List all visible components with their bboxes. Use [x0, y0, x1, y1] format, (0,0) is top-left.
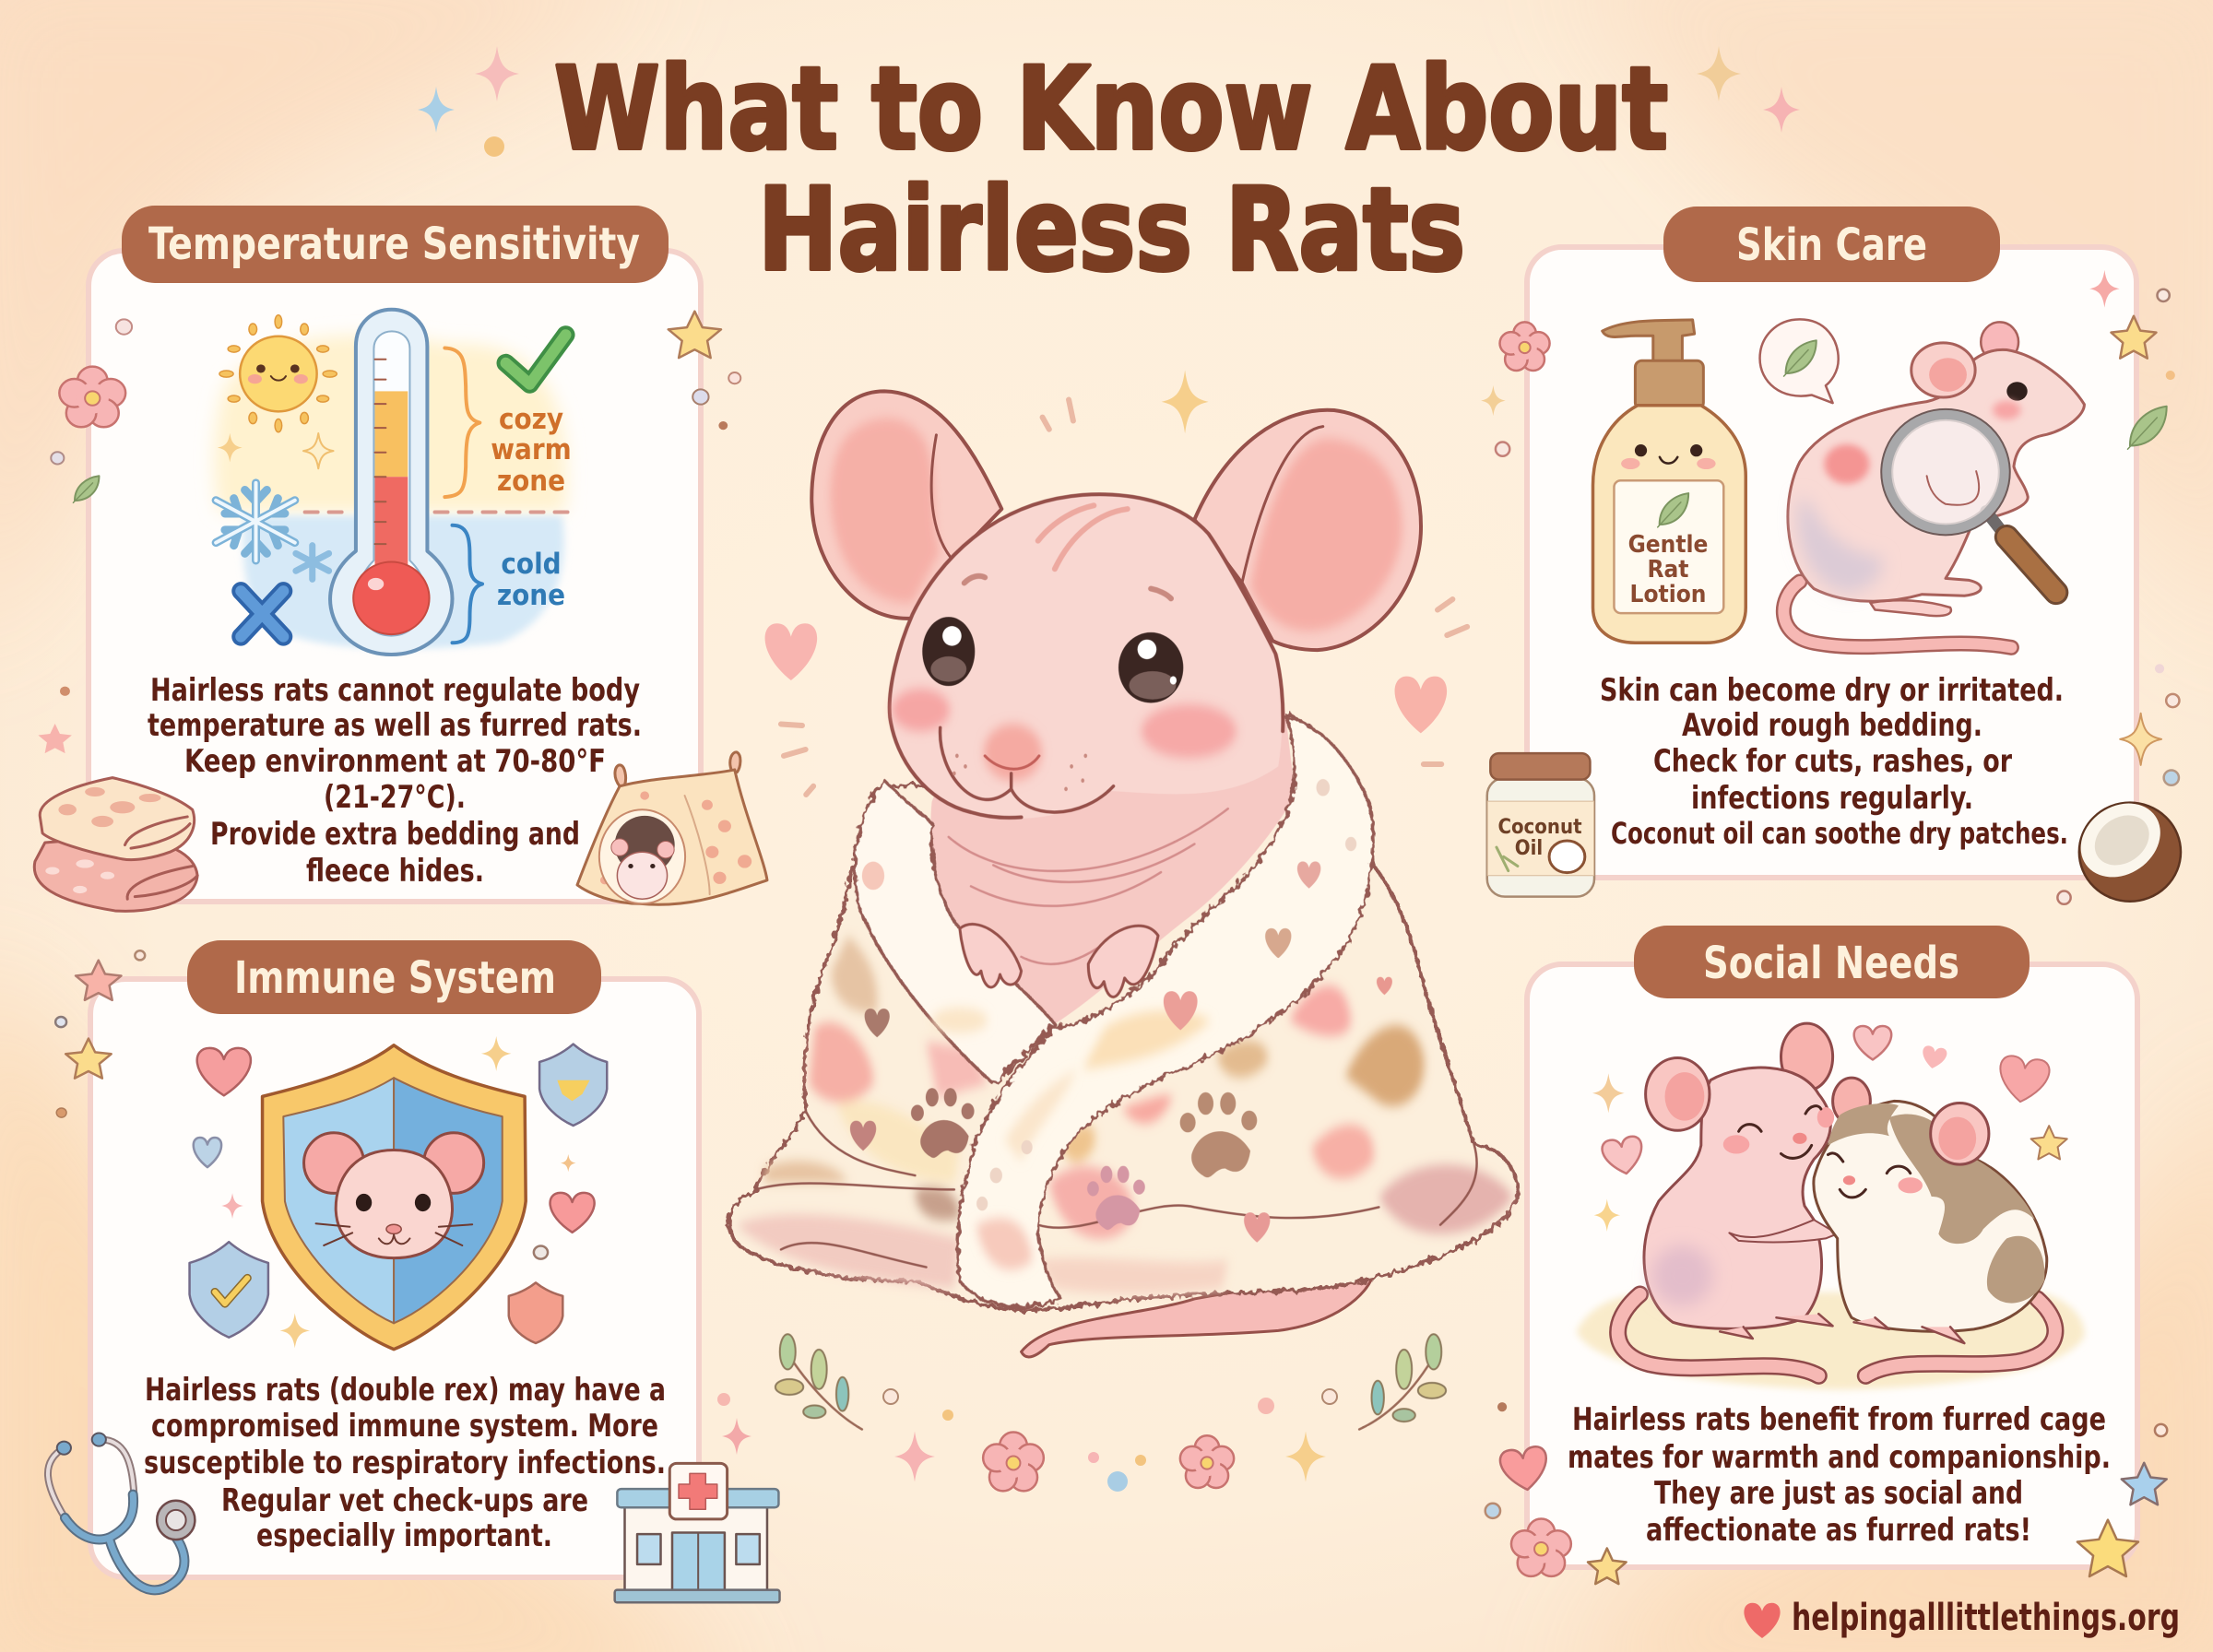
- immune body text: [144, 1372, 666, 1554]
- cozy warm zone label: warm: [491, 433, 572, 466]
- icon: hearts and sparkles: [194, 1036, 595, 1348]
- title: Hairless Rats: [758, 164, 1465, 297]
- social body text: They are just as social and: [1654, 1475, 2023, 1512]
- icon: lotion bottle: [1593, 320, 1746, 643]
- cold zone label: zone: [497, 579, 565, 612]
- social body text: affectionate as furred rats!: [1646, 1512, 2031, 1549]
- temperature body text: [148, 672, 642, 890]
- icon: rat with magnifier: [1783, 322, 2084, 647]
- cold zone label: cold: [501, 548, 562, 581]
- skin care body text: Avoid rough bedding.: [1682, 707, 1982, 744]
- immune illustrations: [48, 950, 780, 1602]
- blanket base: [729, 714, 1519, 1310]
- title: [554, 43, 1668, 297]
- icon: warm zone brace: [444, 348, 479, 497]
- temperature body text: temperature as well as furred rats.: [148, 707, 642, 744]
- icon: cold zone brace: [453, 525, 482, 643]
- icon: footer heart: [1744, 1603, 1781, 1638]
- temperature body text: fleece hides.: [306, 853, 484, 890]
- gentle rat lotion label: Gentle: [1628, 531, 1708, 559]
- title decorations: [418, 46, 1800, 157]
- icon: thermometer: [330, 310, 452, 655]
- icon: furred rat hugging: [1814, 1078, 2055, 1375]
- gentle rat lotion label: Rat: [1648, 556, 1688, 584]
- skin care header pill: Skin Care: [1736, 219, 1927, 271]
- panel: immune system: [48, 940, 780, 1602]
- immune body text: especially important.: [256, 1517, 552, 1554]
- center small decorations: [765, 370, 1467, 795]
- head: [890, 494, 1283, 819]
- left ear: [811, 391, 1001, 619]
- icon: coconut oil jar: [1487, 753, 1594, 897]
- right ear: [1194, 410, 1421, 650]
- panel: temperature sensitivity: [34, 206, 767, 911]
- panel: skin care: [1481, 206, 2181, 904]
- rat paws: [960, 925, 1158, 997]
- social header pill: [1634, 926, 2030, 998]
- icon: speech bubble with leaf: [1760, 319, 1839, 403]
- social body text: Hairless rats benefit from furred cage: [1572, 1401, 2106, 1438]
- rat tail: [1022, 1274, 1373, 1357]
- cozy warm zone label: cozy: [499, 403, 563, 436]
- skin care body text: [1600, 672, 2068, 851]
- temperature header pill: [122, 206, 669, 283]
- coconut oil label: Coconut: [1497, 816, 1582, 839]
- icon: snowflakes: [216, 483, 329, 579]
- panel: social needs: [1485, 926, 2167, 1584]
- social body text: mates for warmth and companionship.: [1568, 1439, 2111, 1476]
- immune panel card: [90, 979, 699, 1577]
- blanket paw prints and hearts: [850, 861, 1392, 1243]
- social decorations: [1485, 1402, 2167, 1584]
- neck and chest: [930, 654, 1295, 1024]
- temperature body text: Keep environment at 70-80°F: [184, 743, 606, 780]
- skin care illustrations: [1481, 270, 2181, 904]
- sandy ground wash: [1577, 1290, 2085, 1390]
- temperature body text: (21-27°C).: [324, 779, 466, 816]
- social panel card: [1527, 964, 2137, 1567]
- social body text: [1568, 1401, 2111, 1549]
- skin care body text: Coconut oil can soothe dry patches.: [1611, 816, 2068, 851]
- cold zone label: [497, 548, 565, 612]
- central rat illustration: [729, 370, 1519, 1429]
- gentle rat lotion label: [1628, 531, 1708, 608]
- immune body text: Hairless rats (double rex) may have a: [145, 1372, 666, 1409]
- temperature decorations and items: [34, 312, 767, 911]
- skin care panel card: [1527, 247, 2136, 878]
- blanket collar left: [855, 781, 1055, 1084]
- icon: stethoscope: [48, 1433, 195, 1590]
- coconut oil label: [1497, 816, 1582, 860]
- icon: hearts and stars: [1592, 1026, 2067, 1232]
- social illustrations: [1485, 1023, 2167, 1584]
- temperature body text: Provide extra bedding and: [210, 816, 580, 853]
- immune body text: Regular vet check-ups are: [221, 1482, 588, 1519]
- icon: folded blankets: [34, 778, 197, 911]
- skin care body text: infections regularly.: [1691, 780, 1973, 817]
- coconut oil label: Oil: [1515, 837, 1543, 860]
- immune header pill: [187, 940, 601, 1014]
- icon: small shields: [190, 1044, 607, 1343]
- social header pill: Social Needs: [1703, 938, 1959, 989]
- sprigs: [775, 1334, 1446, 1429]
- skin care body text: Skin can become dry or irritated.: [1600, 672, 2064, 709]
- icon: blue cross: [241, 591, 283, 637]
- title: What to Know About: [554, 43, 1668, 176]
- icon: shield with rat: [263, 1045, 526, 1350]
- icon: green check: [506, 335, 566, 384]
- immune body text: susceptible to respiratory infections.: [144, 1445, 666, 1481]
- skin care header pill: [1663, 206, 2000, 282]
- icon: veterinary clinic: [615, 1463, 780, 1602]
- icon: fleece hide with rat: [577, 752, 767, 904]
- gentle rat lotion label: Lotion: [1630, 581, 1706, 608]
- immune body text: compromised immune system. More: [151, 1408, 658, 1445]
- temperature panel card: [89, 251, 701, 902]
- bottom center decorations: [717, 1389, 1337, 1492]
- cozy warm zone label: [491, 403, 572, 498]
- icon: coconut half: [2066, 788, 2181, 902]
- blanket front fold: [958, 717, 1373, 1307]
- immune header pill: Immune System: [234, 952, 556, 1004]
- temperature header pill: Temperature Sensitivity: [148, 218, 640, 270]
- icon: smiling sun: [219, 315, 337, 432]
- cozy warm zone label: zone: [497, 465, 565, 498]
- icon: hairless rat hugging: [1618, 1023, 1838, 1375]
- skin care body text: Check for cuts, rashes, or: [1653, 743, 2013, 780]
- temperature body text: Hairless rats cannot regulate body: [150, 672, 640, 709]
- temperature illustration: [215, 310, 573, 655]
- skin care decorations: [1481, 270, 2179, 904]
- immune decorations: [55, 950, 145, 1117]
